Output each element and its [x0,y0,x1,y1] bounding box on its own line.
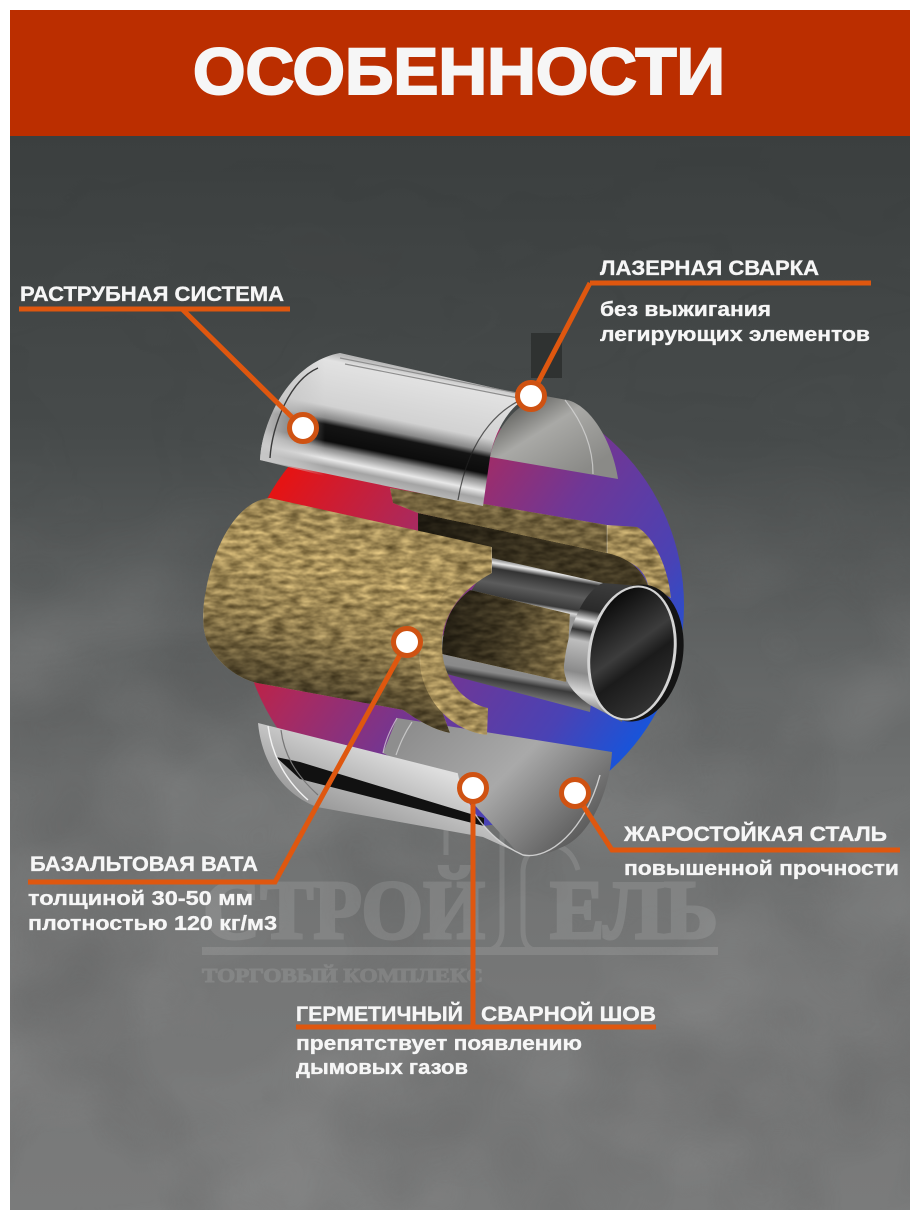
callout: жаростойкая сталь: повышенной прочности [624,858,899,880]
watermark: СТРОЙ [203,864,485,957]
dark square artifact [531,333,562,378]
callout: лазерная сварка: ЛАЗЕРНАЯ СВАРКА [600,257,819,280]
callout: базальтовая вата: толщиной 30-50 мм [28,888,253,910]
callout: лазерная сварка: легирующих элементов [600,324,870,346]
dark wool interior [418,513,648,592]
callout: герметичный сварной шов: препятствует появлению [296,1033,582,1055]
callout: герметичный сварной шов: ГЕРМЕТИЧНЫЙ [296,1002,463,1026]
wool crescent end [607,525,671,598]
gradient circle [254,428,684,826]
callout: герметичный сварной шов: дымовых газов [296,1057,468,1079]
watermark: ТОРГОВЫЙ КОМПЛЕКС [202,964,483,987]
callout: жаростойкая сталь [562,780,900,880]
callout: раструбная система: РАСТРУБНАЯ СИСТЕМА [20,283,284,306]
watermark: ЕЛЬ [550,864,718,957]
top metal shell [260,353,618,506]
bottom metal shell [258,718,612,856]
pipe collar and opening [564,577,693,729]
back wool half [390,488,671,598]
front wool half [203,498,492,735]
callout: базальтовая вата: БАЗАЛЬТОВАЯ ВАТА [30,853,258,876]
callout: лазерная сварка: без выжигания [600,299,771,321]
callout: раструбная система [19,283,316,442]
callout: герметичный сварной шов [296,774,656,1079]
wool reflection [442,590,570,682]
callout: лазерная сварка [518,257,871,410]
callout: герметичный сварной шов: СВАРНОЙ ШОВ [481,1002,656,1026]
title: ОСОБЕННОСТИ [193,34,725,108]
callout: базальтовая вата: плотностью 120 кг/м3 [28,913,277,935]
header banner [10,10,910,136]
watermark [202,816,718,987]
callout: базальтовая вата [28,628,420,935]
wool end face [420,547,492,735]
callout: жаростойкая сталь: ЖАРОСТОЙКАЯ СТАЛЬ [623,822,887,846]
inner steel pipe [440,558,693,729]
